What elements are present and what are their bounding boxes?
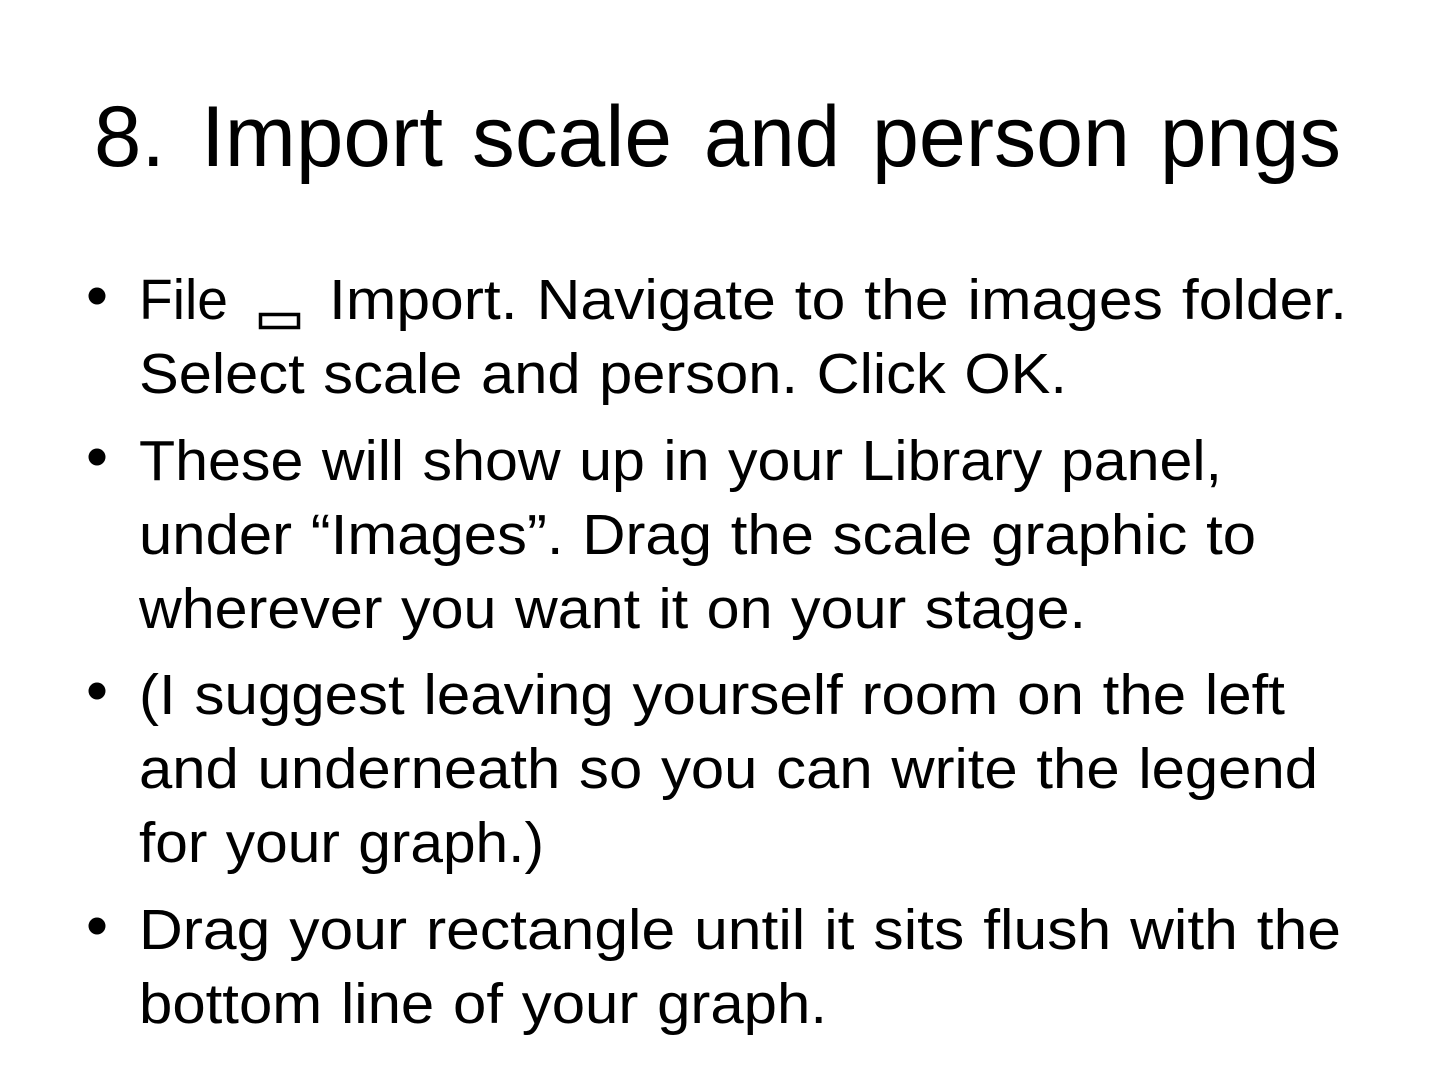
bullet marker 1 <box>88 288 106 304</box>
line 1 word: File: File <box>139 268 228 332</box>
title: person <box>872 89 1130 185</box>
title: scale <box>472 89 672 185</box>
bullet 4: drag rectangle <box>88 898 1341 1036</box>
title: 8. <box>94 89 165 185</box>
line 1: Drag your rectangle until it sits flush with the <box>139 898 1341 962</box>
line 1: (I suggest leaving yourself room on the left <box>139 663 1285 727</box>
line 1: These will show up in your Library panel, <box>139 429 1222 493</box>
title: pngs <box>1160 89 1341 185</box>
bullet marker 4 <box>88 918 106 934</box>
line 3: for your graph.) <box>139 811 544 875</box>
bullet 1: import instructions <box>88 268 1347 406</box>
title: Import <box>201 89 443 185</box>
bullet marker 3 <box>88 682 106 700</box>
line 2: under “Images”. Drag the scale graphic to <box>139 503 1256 567</box>
line 3: wherever you want it on your stage. <box>138 577 1086 641</box>
title <box>94 89 1341 185</box>
line 2: and underneath so you can write the legend <box>139 737 1318 801</box>
line 1 remainder: Import. Navigate to the images folder. <box>329 268 1347 332</box>
bullet 2: library panel <box>88 429 1256 641</box>
title: and <box>704 89 840 185</box>
line 2: bottom line of your graph. <box>139 972 827 1036</box>
bullet marker 2 <box>88 448 106 466</box>
bullet 3: suggestion <box>88 663 1318 875</box>
line 2: Select scale and person. Click OK. <box>139 342 1067 406</box>
icon: missing glyph box <box>260 314 298 328</box>
